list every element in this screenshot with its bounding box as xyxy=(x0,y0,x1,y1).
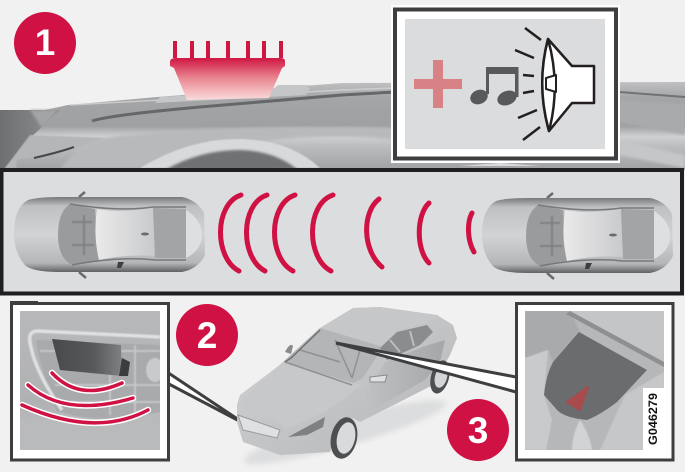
panel: camera sensor xyxy=(516,304,673,460)
panel: distance to vehicle ahead xyxy=(2,170,682,294)
badge 3: 3 xyxy=(468,410,488,451)
car perspective view xyxy=(237,307,457,472)
badge 2: 2 xyxy=(197,315,217,356)
badge 3 xyxy=(447,399,509,461)
callout lines: camera xyxy=(336,343,516,392)
icon: speaker xyxy=(515,28,594,140)
head-up warning light xyxy=(170,41,285,100)
inset: audio warning xyxy=(391,5,620,163)
callout lines: radar sensor xyxy=(167,371,247,424)
panel: radar sensor in grille xyxy=(10,301,168,460)
warning waves xyxy=(220,195,474,271)
badge 1: 1 xyxy=(35,22,55,63)
dashboard illustration xyxy=(0,82,685,170)
vehicle: rear car xyxy=(14,192,205,278)
icon: plus xyxy=(414,60,462,108)
radar waves xyxy=(22,373,148,423)
icon: music notes xyxy=(468,67,519,108)
badge 1 xyxy=(14,12,76,74)
image code: G046279 xyxy=(648,393,660,445)
badge 2 xyxy=(176,304,238,366)
vehicle: front car xyxy=(482,193,673,279)
